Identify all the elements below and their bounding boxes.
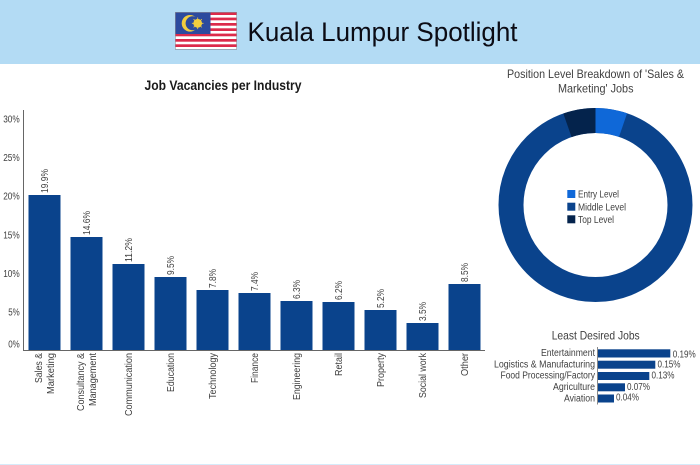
category labels: Engineering — [292, 353, 303, 400]
value labels: 5.2% — [376, 289, 387, 308]
horizontal bars — [598, 349, 670, 402]
value labels: 11.2% — [124, 238, 135, 262]
value labels: 6.3% — [292, 280, 303, 299]
value labels: 0.13% — [652, 371, 675, 382]
y axis labels: 20% — [3, 192, 20, 202]
job labels: Aviation — [564, 394, 595, 405]
icon: Malaysian flag — [175, 12, 237, 50]
category labels: Social work — [418, 352, 429, 398]
category labels: Retail — [334, 353, 345, 376]
donut segment: top level — [563, 108, 596, 137]
donut legend: Top Level — [578, 215, 614, 226]
donut heading: Position Level Breakdown of 'Sales & — [507, 67, 684, 81]
donut legend: Middle Level — [578, 202, 626, 213]
value labels: 14.6% — [82, 211, 93, 235]
value labels: 7.8% — [208, 269, 219, 288]
value labels: 7.4% — [250, 272, 261, 291]
job labels: Entertainment — [541, 348, 595, 359]
donut heading — [507, 67, 684, 96]
y axis labels — [3, 114, 20, 350]
value labels: 0.07% — [627, 382, 650, 393]
y axis labels: 25% — [3, 153, 20, 164]
y axis labels: 15% — [3, 230, 20, 242]
bar chart: job vacancies per industry — [3, 78, 485, 416]
donut chart: position level breakdown — [507, 67, 684, 290]
title: Kuala Lumpur Spotlight — [248, 17, 518, 47]
donut legend: Entry Level — [578, 190, 619, 201]
donut heading: Marketing' Jobs — [558, 82, 634, 96]
bars — [28, 195, 480, 350]
value labels: 3.5% — [418, 302, 429, 321]
category labels: Management — [88, 353, 99, 406]
category labels — [34, 352, 471, 416]
value labels: 6.2% — [334, 281, 345, 300]
category labels: Education — [166, 353, 177, 392]
value labels: 0.15% — [658, 359, 681, 370]
value labels: 8.5% — [460, 263, 471, 282]
job labels: Food Processing/Factory — [500, 371, 595, 382]
donut ring: middle level — [511, 120, 680, 290]
category labels: Other — [460, 352, 471, 376]
category labels: Finance — [250, 353, 261, 383]
y axis labels: 5% — [8, 308, 20, 318]
value labels — [40, 169, 471, 321]
category labels: Technology — [208, 353, 219, 399]
footer line — [0, 464, 700, 465]
donut legend — [567, 190, 626, 226]
value labels: 9.5% — [166, 256, 177, 275]
donut segment: entry level — [596, 108, 627, 137]
category labels: Communication — [124, 353, 135, 416]
category labels: Sales & — [34, 353, 45, 383]
y axis labels: 30% — [3, 114, 20, 126]
y axis labels: 0% — [8, 340, 20, 350]
job labels — [494, 348, 595, 405]
y axis labels: 10% — [3, 269, 20, 280]
horizontal bar chart: least desired jobs — [494, 328, 696, 405]
category labels: Consultancy & — [76, 353, 87, 411]
least desired heading: Least Desired Jobs — [552, 328, 640, 342]
vertical axis — [596, 347, 598, 404]
value labels: 0.04% — [616, 392, 639, 403]
job labels: Logistics & Manufacturing — [494, 359, 595, 370]
bar chart heading: Job Vacancies per Industry — [144, 78, 302, 93]
value labels: 19.9% — [40, 169, 51, 193]
axes — [24, 110, 485, 350]
value labels — [616, 350, 696, 403]
category labels: Property — [376, 353, 387, 387]
header banner — [0, 0, 700, 64]
category labels: Marketing — [46, 353, 57, 394]
job labels: Agriculture — [553, 382, 595, 393]
